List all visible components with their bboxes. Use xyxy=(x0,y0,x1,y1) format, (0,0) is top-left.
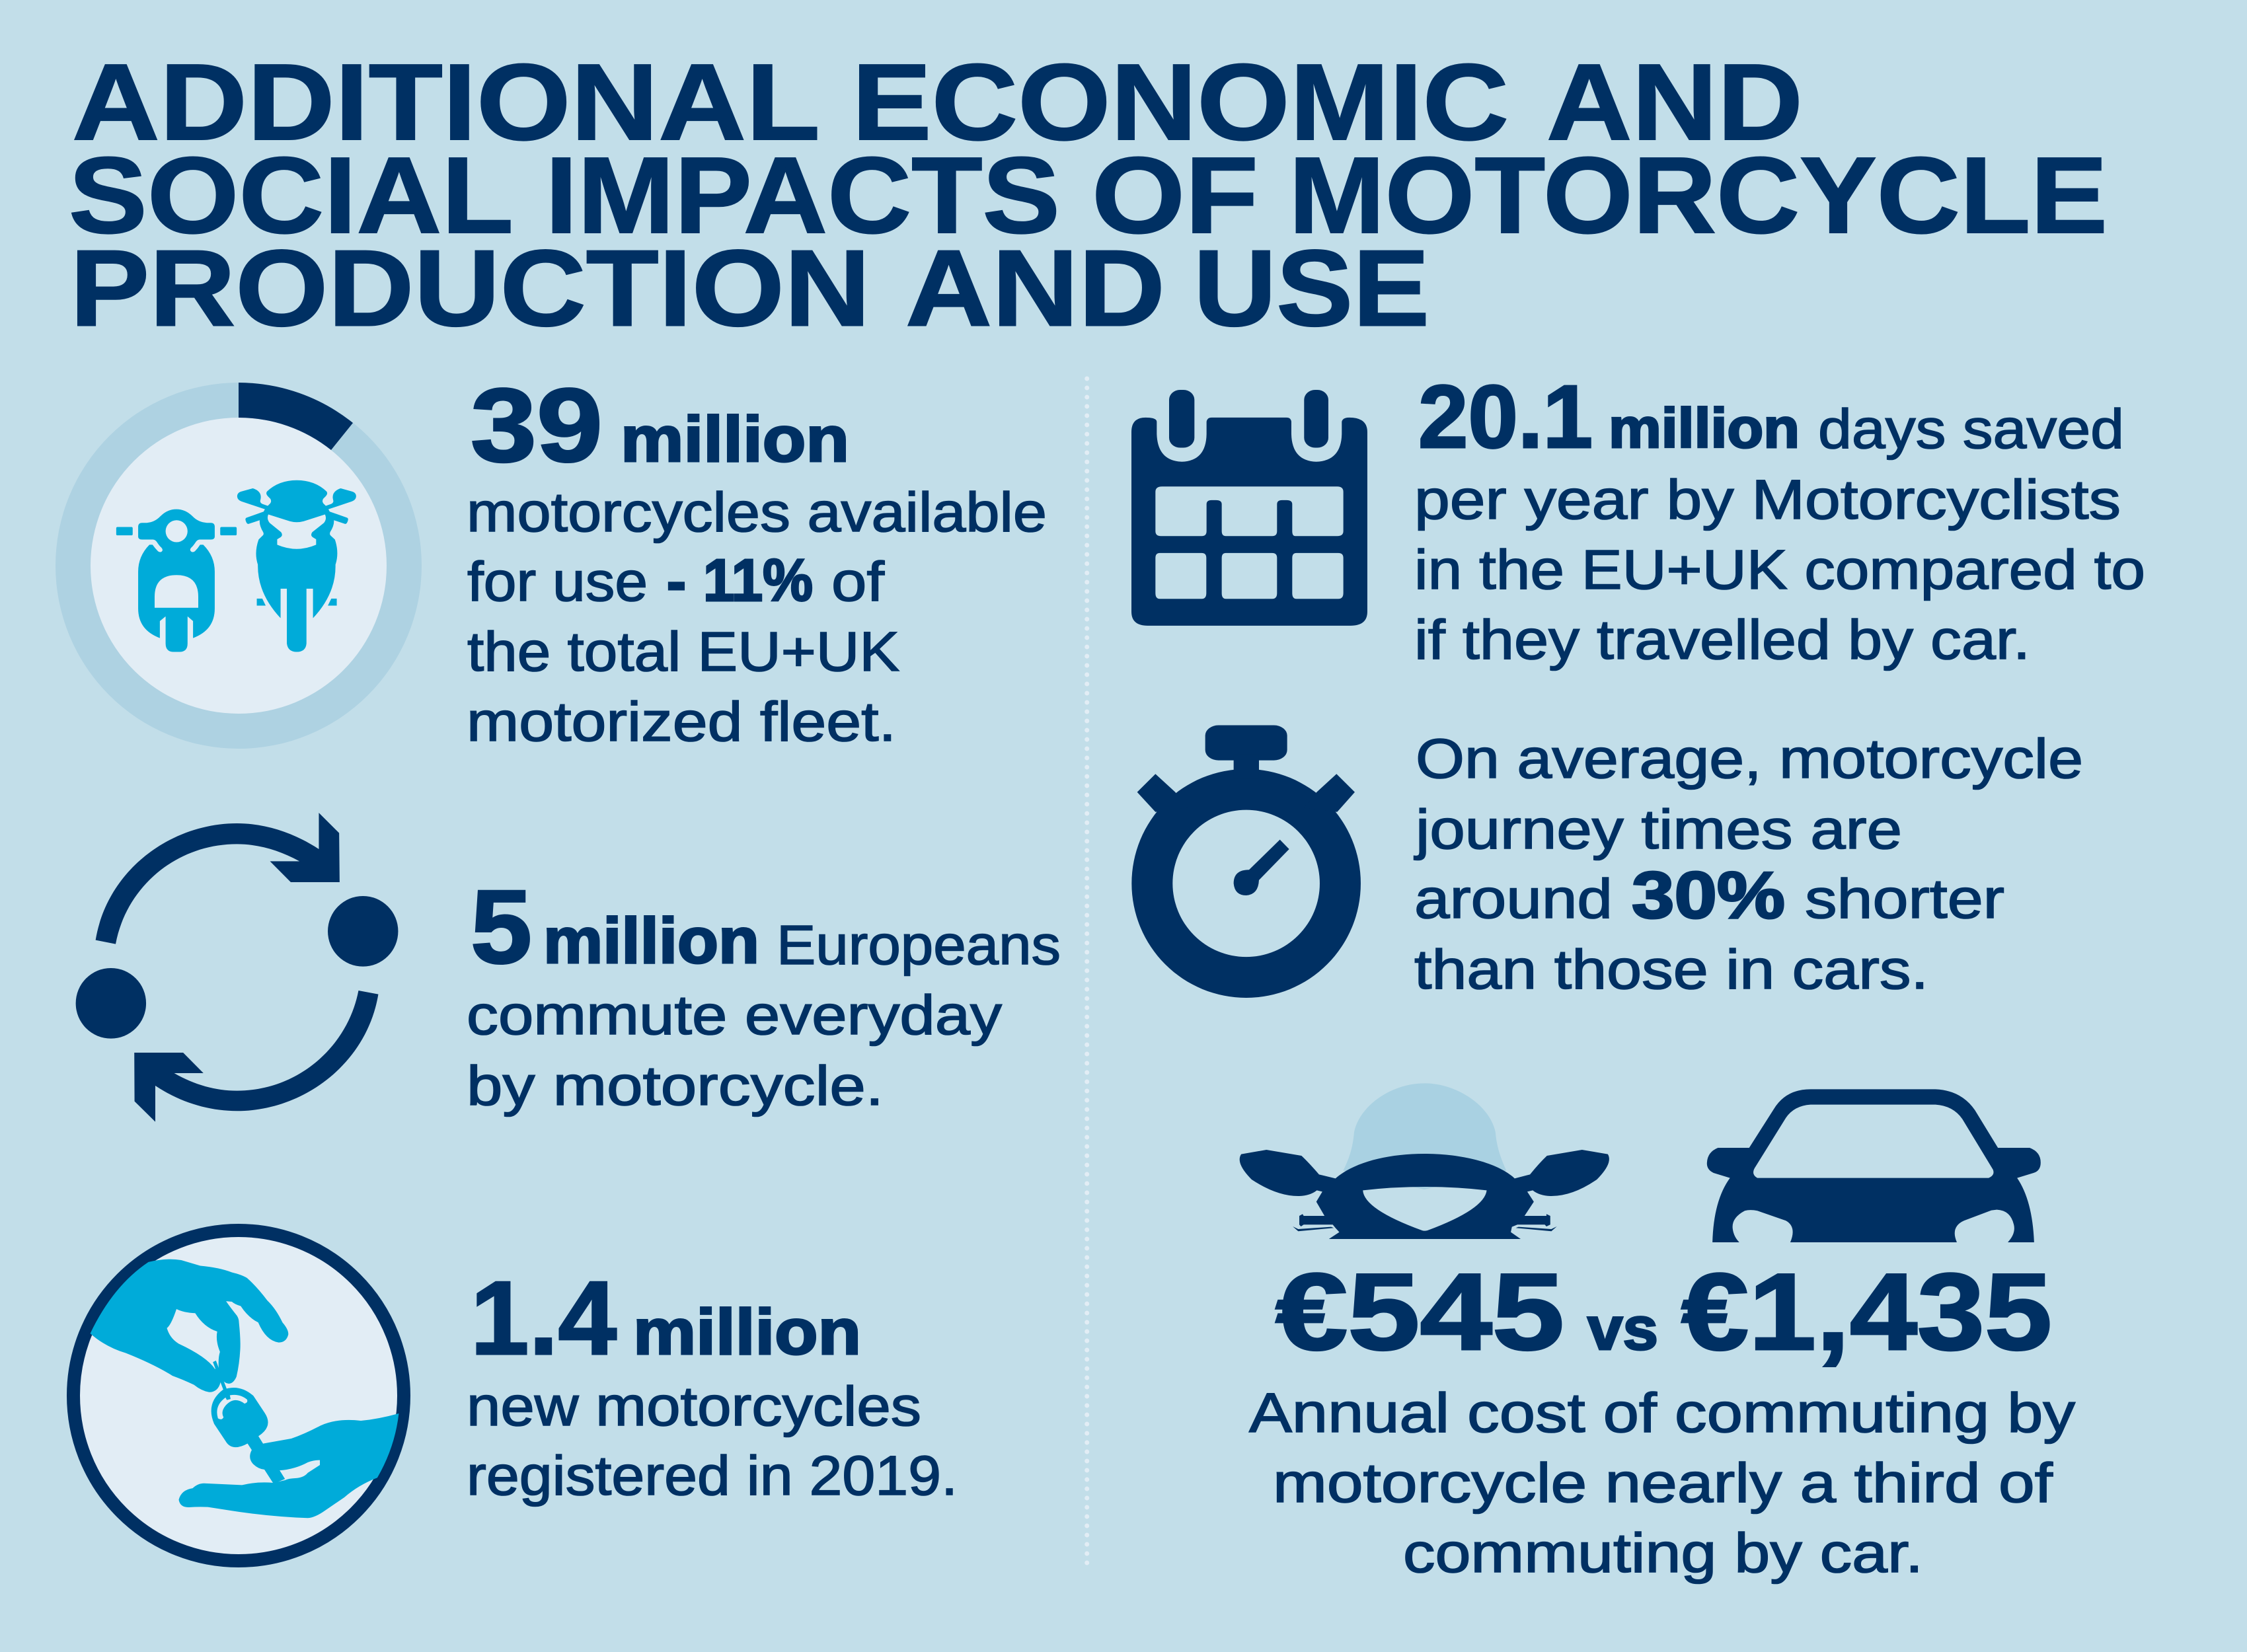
stat: 1.4 million new motorcycles xyxy=(467,1260,958,1507)
stat: 5 million Europeans: Europeans xyxy=(777,914,1061,976)
stat: commuting cost comparison xyxy=(1276,1251,2052,1372)
title: AND xyxy=(905,227,1165,349)
title: USE xyxy=(1194,227,1429,349)
stat: commuting cost comparison: €1,435 xyxy=(1681,1251,2052,1372)
title: PRODUCTION xyxy=(70,227,870,349)
title: IMPACTS xyxy=(545,135,1060,256)
stat: 20.1 million days saved: in the EU+UK compared to xyxy=(1414,539,2145,601)
stat: 39 million motorcycles xyxy=(467,367,1047,753)
stat: 20.1 million days saved: days saved xyxy=(1818,398,2124,460)
icon: car front view xyxy=(1707,1089,2041,1242)
stat: 20.1 million days saved: million xyxy=(1609,397,1800,459)
stat: 5 million Europeans: 5 xyxy=(471,869,532,985)
stat: 30% shorter journeys: shorter xyxy=(1805,868,2004,930)
icon: commute cycle arrows xyxy=(76,813,398,1122)
text: annual cost description: motorcycle nearly a third of xyxy=(1273,1452,2053,1514)
stat: 20.1 million days saved xyxy=(1414,367,2145,671)
title: AND xyxy=(1546,42,1803,163)
stat: 5 million Europeans: commute everyday xyxy=(467,984,1002,1046)
icon: calendar xyxy=(1131,390,1367,626)
icon: donut with scooter and motorcycle xyxy=(56,383,422,749)
stat: 39 million motorcycles: for use xyxy=(467,550,648,613)
stat: 5 million Europeans: million xyxy=(543,905,759,977)
title: ECONOMIC xyxy=(852,42,1509,163)
icon: stopwatch xyxy=(1131,726,1361,998)
stat: 30% shorter journeys: On average, motorcycle xyxy=(1416,728,2083,790)
stat: 39 million motorcycles: 11% xyxy=(703,548,813,614)
stat: 39 million motorcycles: of xyxy=(831,550,885,613)
text: annual cost description: commuting by car. xyxy=(1403,1522,1923,1584)
icon: handing over keys xyxy=(73,1230,404,1561)
stat: 39 million motorcycles: million xyxy=(621,403,849,475)
stat: 1.4 million new motorcycles: new motorcycles xyxy=(467,1375,921,1437)
stat: commuting cost comparison: vs xyxy=(1587,1295,1658,1363)
stat: 39 million motorcycles: motorized fleet. xyxy=(467,691,896,753)
stat: 30% shorter journeys: 30% xyxy=(1632,858,1785,932)
title xyxy=(69,42,2108,349)
stat: 1.4 million new motorcycles: million xyxy=(633,1296,861,1368)
title: SOCIAL xyxy=(69,135,514,256)
stat: 39 million motorcycles: - xyxy=(667,550,686,613)
stat: 39 million motorcycles: motorcycles available xyxy=(467,481,1047,543)
stat: 20.1 million days saved: 20.1 xyxy=(1418,367,1593,467)
stat: 1.4 million new motorcycles: 1.4 xyxy=(471,1260,617,1376)
title: OF xyxy=(1092,135,1258,256)
stat: 30% shorter journeys: around xyxy=(1414,868,1613,930)
stat: 39 million motorcycles: the total EU+UK xyxy=(467,620,899,683)
icon: motorcycle front view xyxy=(1240,1083,1609,1239)
stat: 20.1 million days saved: if they travelled by car. xyxy=(1414,609,2030,671)
stat: 20.1 million days saved: per year by Motorcyclists xyxy=(1414,469,2121,531)
stat: 5 million Europeans: by motorcycle. xyxy=(467,1055,884,1117)
stat: commuting cost comparison: €545 xyxy=(1276,1251,1564,1372)
stat: 30% shorter journeys xyxy=(1414,728,2083,1000)
title: ADDITIONAL xyxy=(72,42,820,163)
text: annual cost description: Annual cost of commuting by xyxy=(1249,1382,2075,1444)
text: annual cost description xyxy=(1249,1382,2075,1584)
stat: 39 million motorcycles: 39 xyxy=(471,367,603,484)
stat: 30% shorter journeys: than those in cars. xyxy=(1414,938,1928,1000)
stat: 30% shorter journeys: journey times are xyxy=(1414,798,1902,860)
title: MOTORCYCLE xyxy=(1289,135,2108,256)
stat: 1.4 million new motorcycles: registered in 2019. xyxy=(467,1445,958,1507)
stat: 5 million Europeans xyxy=(467,869,1061,1117)
